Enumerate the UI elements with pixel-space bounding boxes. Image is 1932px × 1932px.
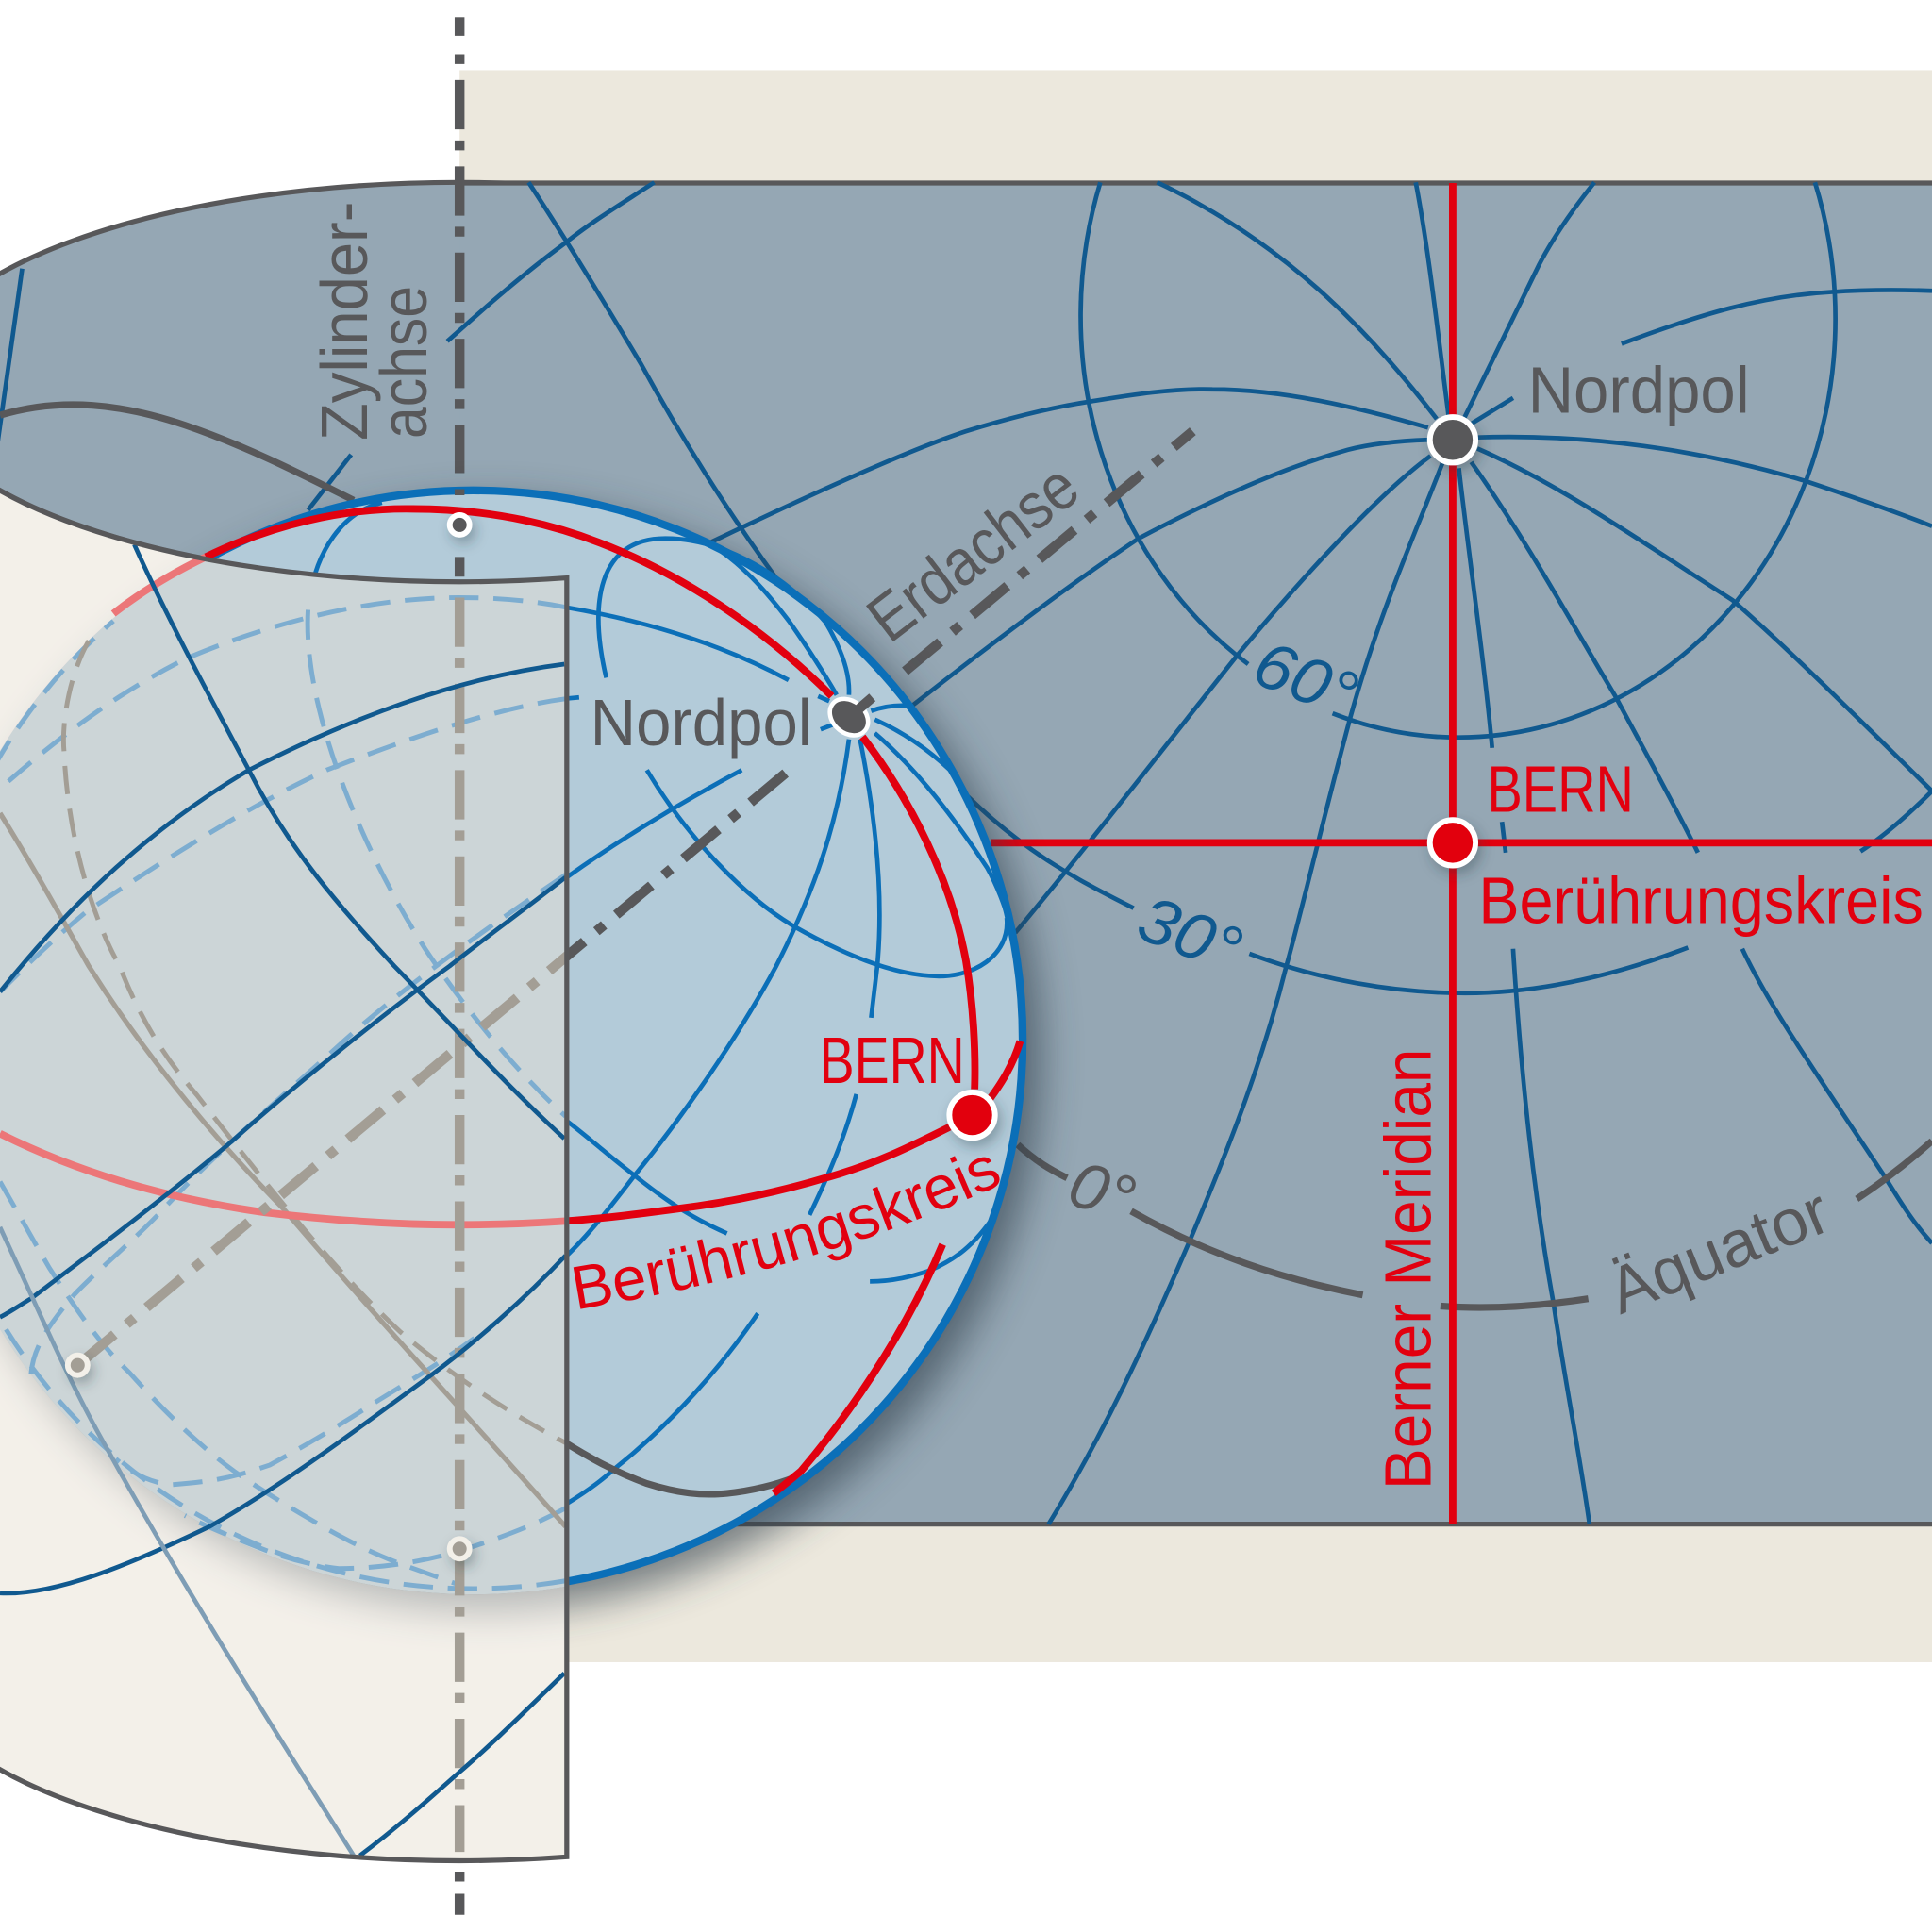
axis end points (68, 515, 470, 1558)
label: Zylinderachse: achse (367, 286, 441, 439)
marker: north pole on the globe (823, 691, 875, 742)
marker: north pole on the cylinder (1430, 417, 1475, 462)
marker: Bern on the globe (949, 1092, 995, 1138)
lines on the front sheet (0, 544, 566, 1856)
label: 30 degrees: 30° (1128, 881, 1252, 987)
label: Äquator: Äquator (1598, 1174, 1840, 1328)
Earth axis behind the sheet, muted (83, 951, 564, 1362)
label: Zylinderachse (308, 202, 441, 441)
cylinder axis behind the sheet, muted (456, 597, 463, 1852)
cylinder axis lower end (456, 1872, 463, 1915)
hidden parts of the graticule, dashed (0, 597, 567, 1589)
shadow softening on the front sheet (0, 1329, 564, 1632)
hidden tangent circle, muted red (0, 557, 566, 1224)
label: BERN on the globe: BERN (820, 1024, 965, 1097)
cream cylinder band (459, 70, 1932, 1662)
graticule on the cylinder: parallels 60 and 30 degrees (966, 182, 1932, 993)
front sheet outline (0, 382, 567, 1860)
label: 60 degrees: 60° (1244, 625, 1367, 732)
Earth axis upper part (828, 431, 1192, 736)
front sheet of the cylinder (0, 382, 567, 1860)
globe shadow (0, 504, 1041, 1610)
label: Zylinderachse: Zylinder- (308, 202, 381, 441)
cylinder axis upper part (456, 17, 463, 474)
graticule on the cylinder: meridians (0, 182, 1932, 1524)
label: Berner Meridian: Berner Meridian (1371, 1049, 1444, 1490)
globe (0, 491, 1023, 1590)
panel: unrolled cylinder surface (0, 182, 1932, 1524)
equator on the cylinder (0, 405, 1932, 1307)
equator on the globe (566, 1442, 794, 1494)
red meridian and tangent circle on the globe (206, 508, 1020, 1493)
label: 0 degrees: 0° (1060, 1146, 1144, 1236)
label: BERN on the cylinder: BERN (1487, 753, 1634, 826)
cylinder axis inside the globe above the sheet (456, 490, 463, 576)
label: Nordpol on the cylinder: Nordpol (1528, 354, 1750, 427)
marker: Bern on the cylinder (1430, 820, 1475, 866)
Berner Meridian and tangent circle on the cylinder (991, 183, 1932, 1524)
label: Nordpol on the globe: Nordpol (591, 686, 812, 759)
Earth axis inside the globe, visible part (569, 770, 789, 960)
globe seen through the front sheet (0, 561, 564, 1594)
label: Erdachse: Erdachse (854, 449, 1091, 656)
globe graticule (308, 503, 1010, 1505)
hidden equator, muted (0, 641, 566, 1526)
label: Berührungskreis on the globe: Berührungskreis (574, 1156, 1000, 1309)
